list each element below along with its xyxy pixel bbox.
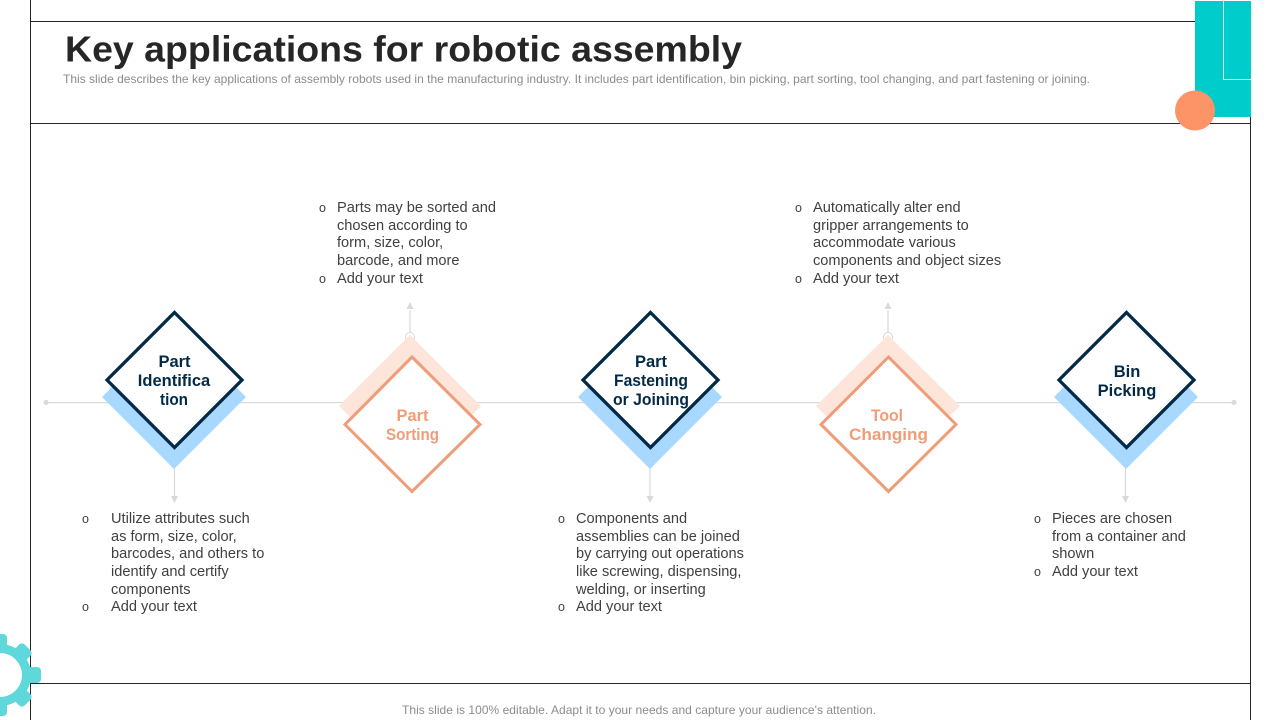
title: Key applications for robotic assembly	[65, 28, 743, 70]
step 1 text	[82, 511, 264, 615]
icon: orange circle	[1175, 90, 1215, 130]
arrow down	[646, 466, 654, 503]
step 4 text: accommodate various	[813, 235, 956, 251]
step 5 text: shown	[1052, 546, 1094, 562]
step 3 text	[558, 511, 744, 615]
step 1 text: Add your text	[111, 599, 197, 615]
step 1 text: barcodes, and others to	[111, 546, 264, 562]
label: tion	[160, 391, 188, 409]
label: Bin	[1114, 363, 1140, 381]
step 5 text: from a container and	[1052, 529, 1186, 545]
diamond shadow	[102, 325, 246, 469]
step 4 text: Automatically alter end	[813, 200, 961, 216]
step 2 text: Parts may be sorted and	[337, 200, 496, 216]
step 3 text: by carrying out operations	[576, 546, 744, 562]
label: or Joining	[613, 391, 689, 409]
arrow up	[884, 302, 892, 342]
diamond	[1059, 312, 1194, 448]
label: Part	[396, 407, 429, 425]
icon: teal corner block	[1195, 1, 1251, 117]
step 1: part identification	[102, 312, 246, 503]
step 5 text: o	[1034, 512, 1041, 526]
label	[849, 407, 928, 444]
step 2 text: Add your text	[337, 271, 423, 287]
timeline connector	[44, 400, 1236, 405]
label: Identifica	[138, 372, 211, 390]
label: Fastening	[614, 372, 688, 390]
arrow down	[1122, 466, 1129, 503]
step 4: tool changing	[816, 302, 960, 492]
step 5 text	[1034, 511, 1186, 580]
step 2 text: o	[319, 201, 326, 215]
step 1 text: as form, size, color,	[111, 529, 237, 545]
arrow down	[171, 466, 178, 503]
label: Sorting	[386, 426, 439, 444]
label: Part	[635, 353, 668, 371]
step 4 text: o	[795, 201, 802, 215]
step 4 text: components and object sizes	[813, 253, 1001, 269]
diamond	[821, 357, 956, 492]
step 1 text: Utilize attributes such	[111, 511, 250, 527]
label	[386, 407, 439, 444]
diamond shadow	[339, 335, 481, 477]
step 3 text: assemblies can be joined	[576, 529, 740, 545]
label	[613, 353, 689, 409]
step 2 text	[319, 200, 496, 287]
step 1 text: o	[82, 600, 89, 614]
arrow up	[406, 302, 414, 342]
step 4 text: o	[795, 272, 802, 286]
step 2: part sorting	[339, 302, 481, 492]
step 3: part fastening or joining	[578, 312, 722, 503]
step 3 text: o	[558, 512, 565, 526]
diamond shadow	[578, 325, 722, 469]
step 4 text: gripper arrangements to	[813, 218, 969, 234]
step 2 text: o	[319, 272, 326, 286]
step 3 text: Components and	[576, 511, 687, 527]
icon: teal gear	[0, 634, 41, 716]
label	[138, 353, 211, 409]
step 1 text: identify and certify	[111, 564, 229, 580]
step 3 text: Add your text	[576, 599, 662, 615]
label: Tool	[871, 407, 903, 425]
label	[1098, 363, 1156, 400]
step 3 text: welding, or inserting	[575, 582, 706, 598]
step 1 text: o	[82, 512, 89, 526]
diamond shadow	[1054, 325, 1198, 469]
subtitle: This slide describes the key applications of assembly robots used in the manufacturing industry. It includes part identification, bin picking, part sorting, tool changing, and part fastening or joining.	[63, 72, 1090, 86]
step 3 text: like screwing, dispensing,	[576, 564, 741, 580]
step 4 text: Add your text	[813, 271, 899, 287]
diamond	[345, 357, 480, 492]
step 2 text: form, size, color,	[337, 235, 443, 251]
diamond shadow	[816, 335, 960, 477]
step 3 text: o	[558, 600, 565, 614]
step 5 text: Pieces are chosen	[1052, 511, 1172, 527]
step 2 text: barcode, and more	[337, 253, 460, 269]
label: Part	[158, 353, 191, 371]
footer note: This slide is 100% editable. Adapt it to your needs and capture your audience's attention.	[402, 703, 876, 717]
label: Changing	[849, 426, 928, 444]
diamond	[583, 312, 718, 448]
step 2 text: chosen according to	[337, 218, 468, 234]
step 5 text: Add your text	[1052, 564, 1138, 580]
step 5 text: o	[1034, 565, 1041, 579]
step 4 text	[795, 200, 1001, 287]
diamond	[107, 312, 242, 448]
step 1 text: components	[111, 582, 191, 598]
label: Picking	[1098, 382, 1156, 400]
step 5: bin picking	[1054, 312, 1198, 503]
